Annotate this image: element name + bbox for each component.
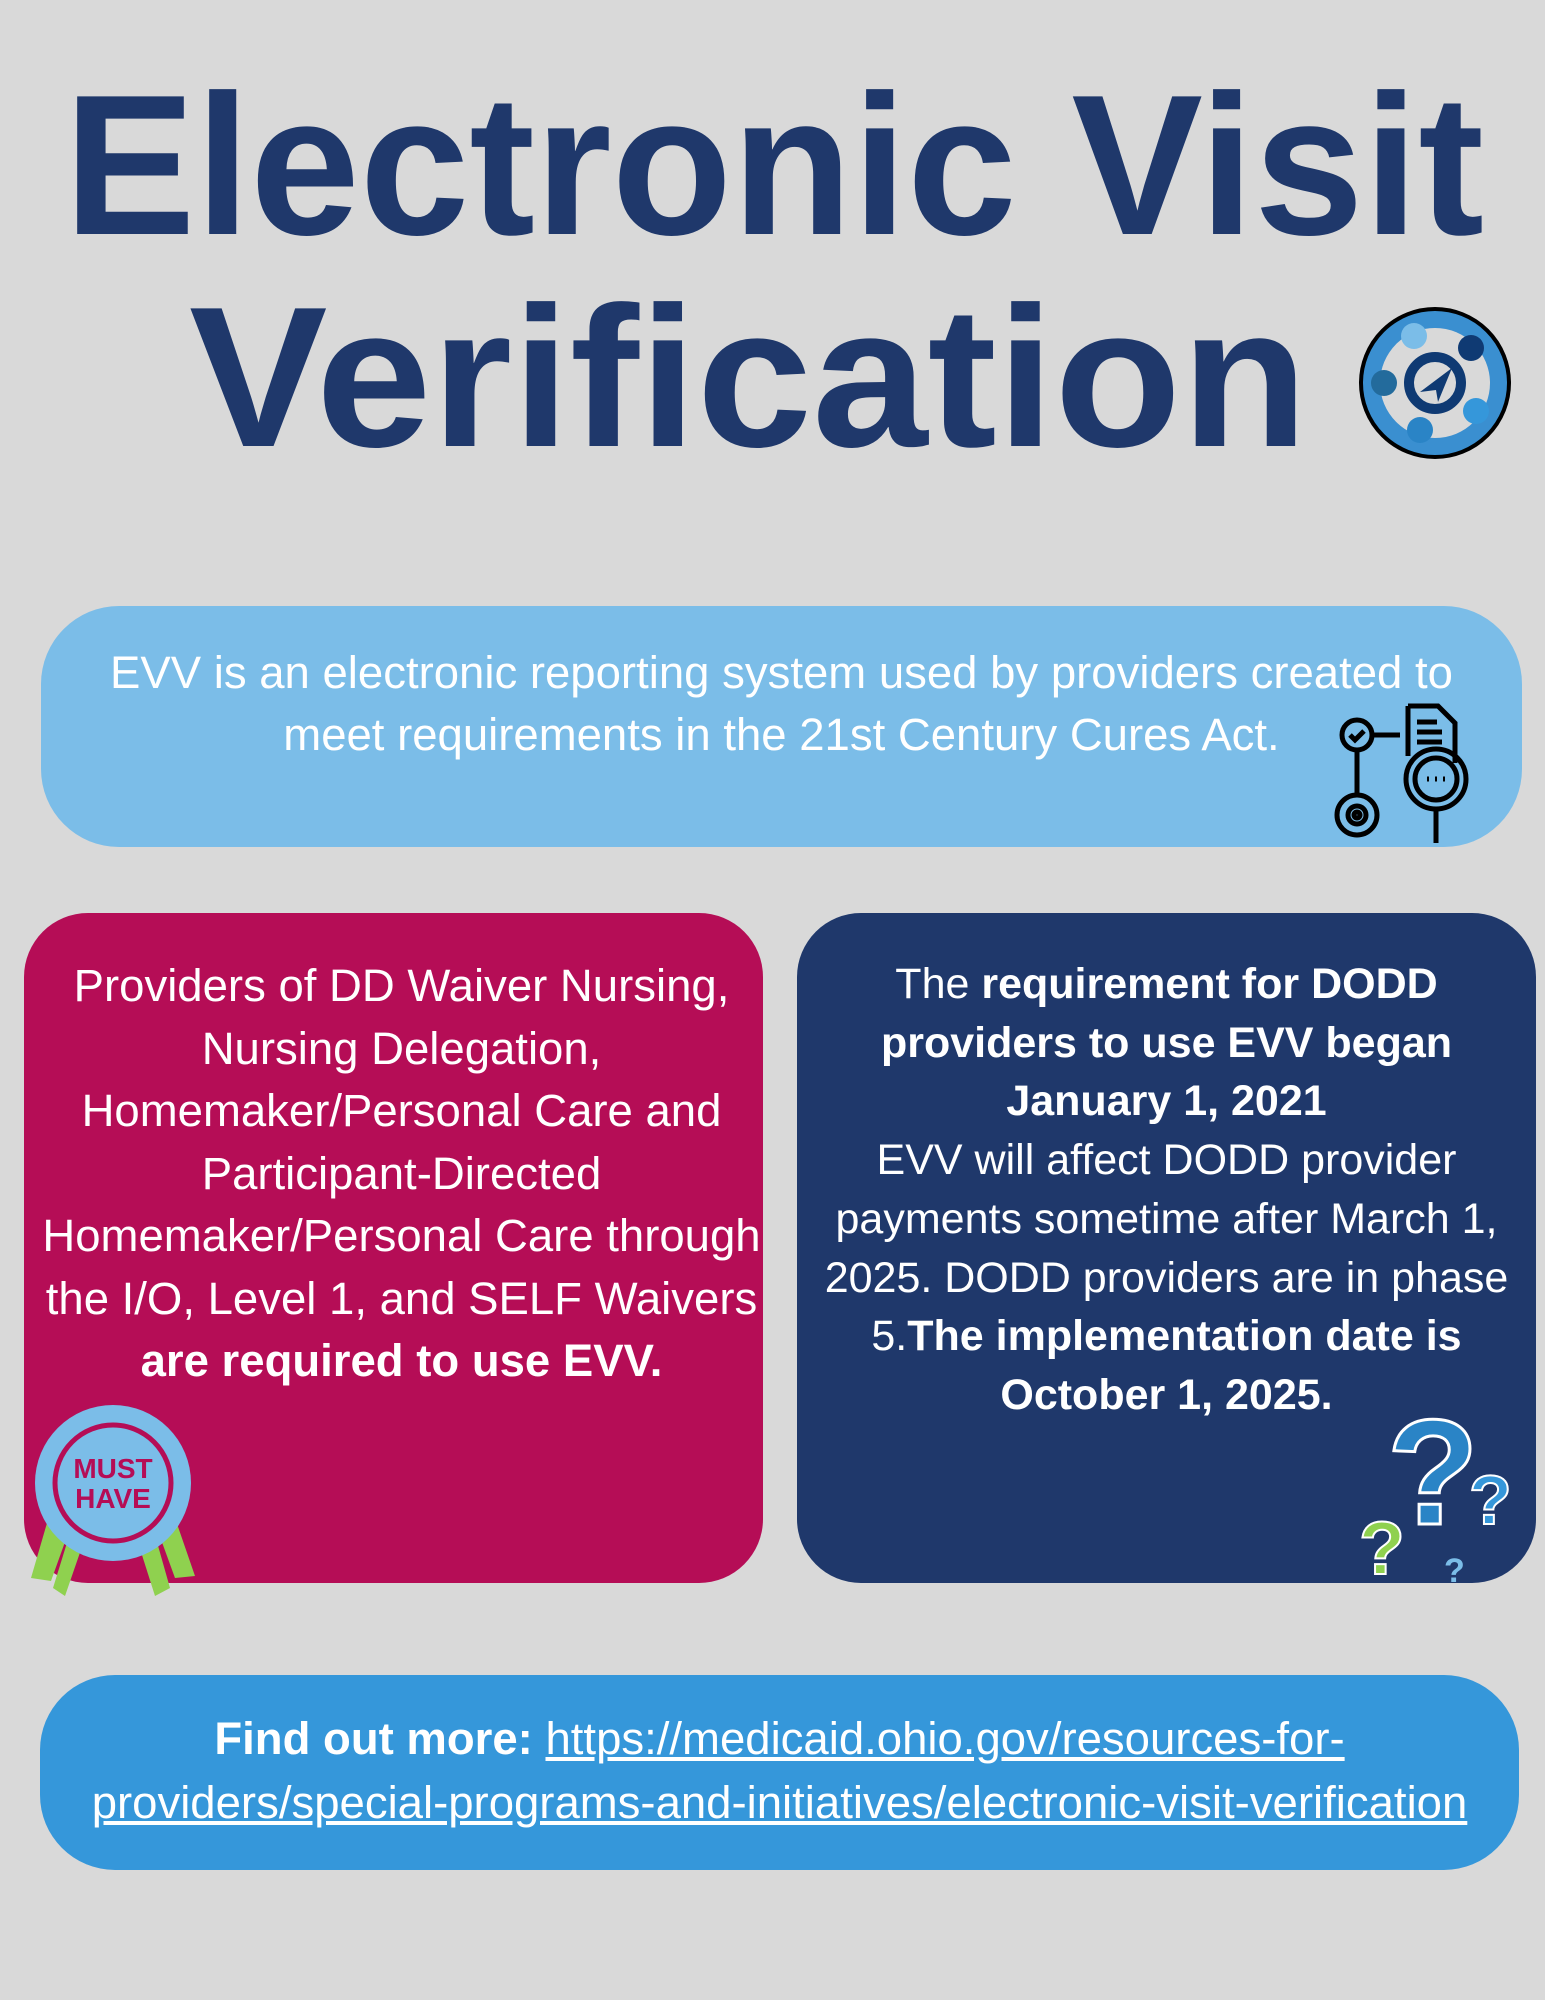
title: Electronic Visit: [64, 54, 1484, 277]
dates text: [825, 960, 1508, 1419]
providers text: the I/O, Level 1, and SELF Waivers: [46, 1272, 757, 1324]
providers text: are required to use EVV.: [141, 1335, 662, 1386]
icon: must have badge: [31, 1405, 195, 1596]
icon: document magnifier: [1334, 704, 1468, 843]
panel: find out more: [40, 1675, 1519, 1870]
icon: logo: [1359, 307, 1511, 459]
dates text: 2025. DODD providers are in phase: [825, 1254, 1508, 1302]
intro text: [110, 647, 1453, 760]
providers text: Homemaker/Personal Care and: [82, 1085, 721, 1136]
icon: question marks: ?: [1469, 1461, 1512, 1539]
intro text: EVV is an electronic reporting system used by providers created to: [110, 647, 1453, 698]
dates text: EVV will affect DODD provider: [877, 1136, 1456, 1184]
link text: [92, 1713, 1468, 1828]
dates text: payments sometime after March 1,: [836, 1195, 1497, 1243]
dates text: October 1, 2025.: [1000, 1371, 1333, 1419]
dates text: The requirement for DODD: [895, 960, 1438, 1008]
dates text: January 1, 2021: [1006, 1077, 1327, 1125]
dates text: providers to use EVV began: [881, 1019, 1452, 1067]
icon: must have badge: HAVE: [75, 1483, 151, 1514]
providers text: [42, 960, 761, 1386]
link text: Find out more: https://medicaid.ohio.gov/resources-for-: [214, 1713, 1345, 1764]
icon: question marks: [1359, 1388, 1512, 1584]
providers text: Providers of DD Waiver Nursing,: [74, 960, 729, 1011]
icon: question marks: ?: [1387, 1388, 1479, 1556]
panel: dates: [797, 913, 1536, 1583]
providers text: Participant-Directed: [202, 1148, 601, 1198]
dates text: 5.The implementation date is: [871, 1312, 1462, 1360]
providers text: Nursing Delegation,: [202, 1022, 601, 1074]
panel: intro: [41, 606, 1522, 847]
icon: must have badge: MUST: [73, 1453, 153, 1484]
providers text: Homemaker/Personal Care through: [42, 1210, 761, 1261]
title: [64, 54, 1484, 480]
intro text: meet requirements in the 21st Century Cures Act.: [283, 709, 1280, 760]
link text: providers/special-programs-and-initiatives/electronic-visit-verification: [92, 1777, 1467, 1828]
panel: providers: [24, 913, 763, 1583]
